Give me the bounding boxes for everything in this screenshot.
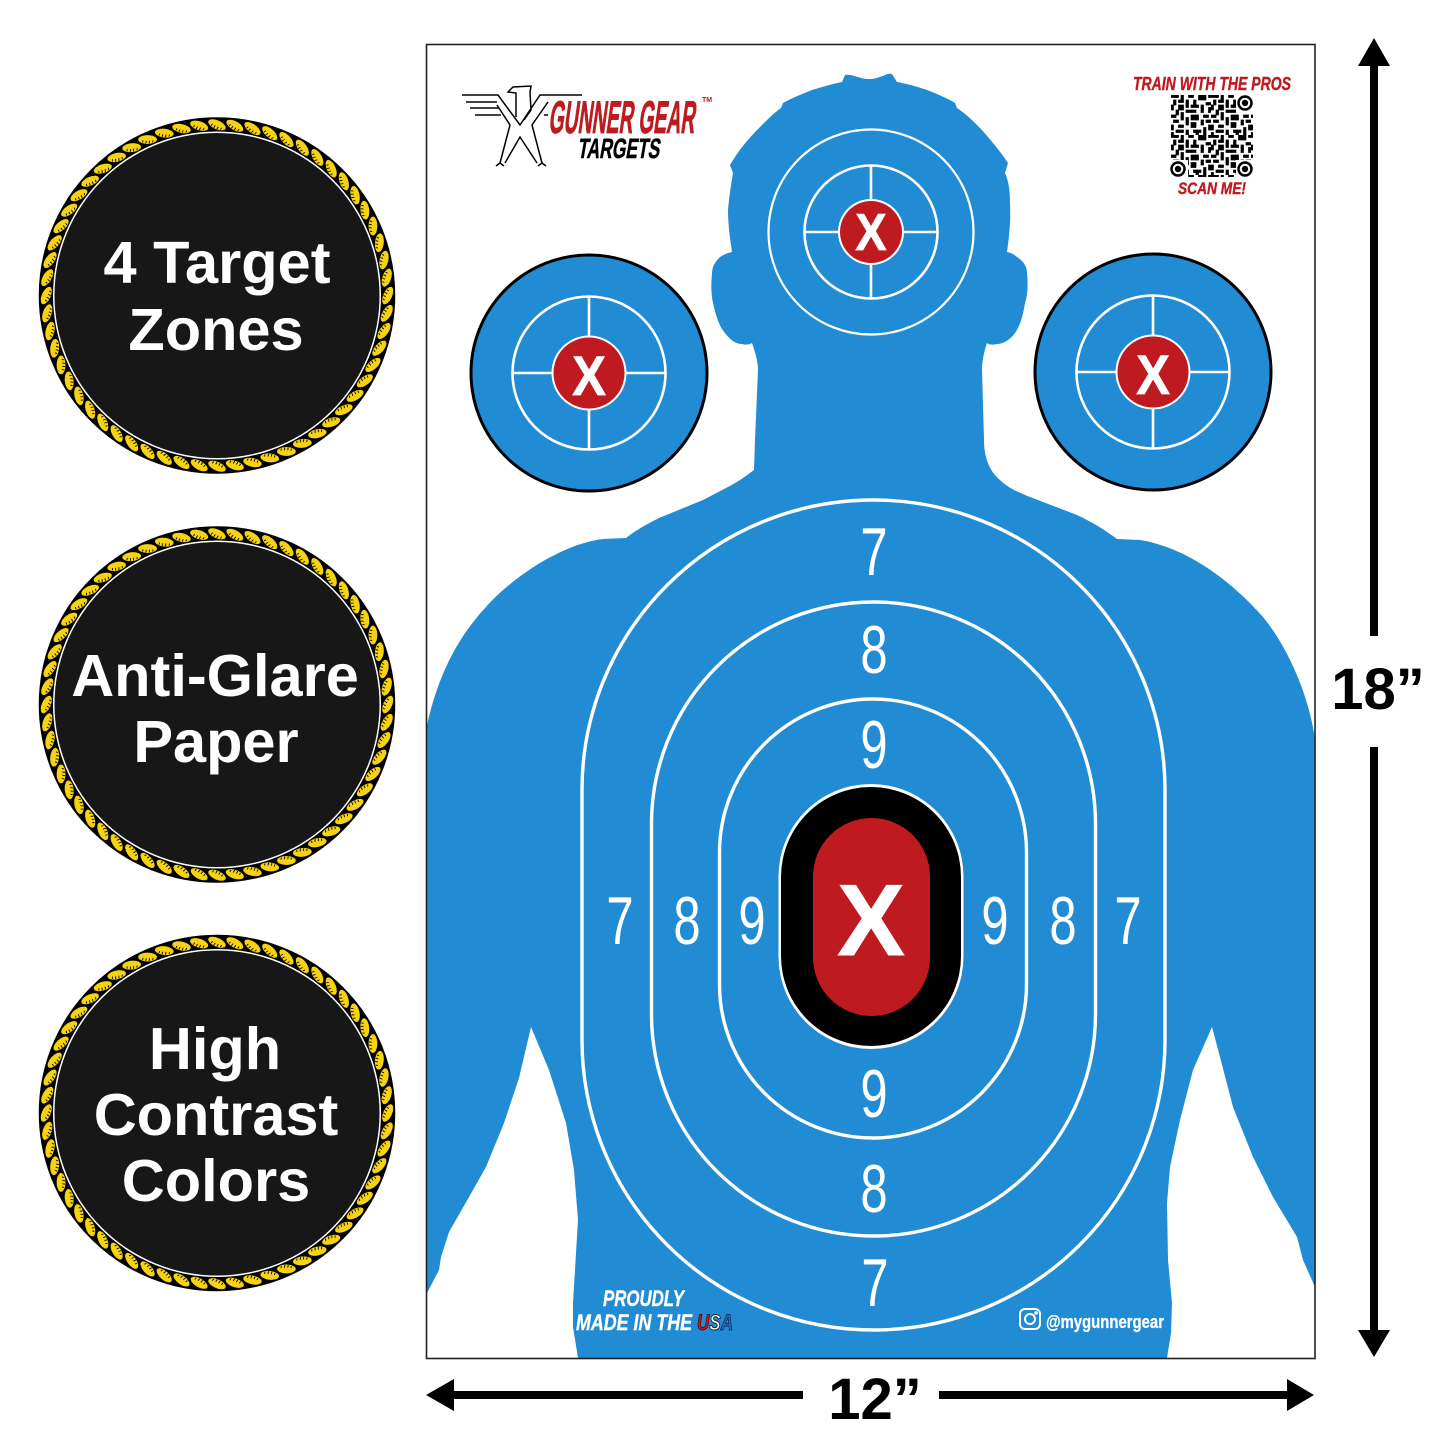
badge: High Contrast Colors: [16, 909, 418, 1317]
logo: Gunner Gear Targets: [462, 86, 712, 166]
logo: Gunner Gear Targets: TARGETS: [576, 132, 664, 164]
panel: paper target: GUNNER GEAR: [547, 91, 700, 143]
center X zone: [778, 784, 964, 1049]
made in the USA text: PROUDLY: [603, 1286, 686, 1311]
center X zone: X: [837, 865, 905, 977]
zone numbers: 9: [860, 706, 888, 783]
QR code: [1170, 95, 1254, 178]
badge: High Contrast Colors: Colors: [122, 1147, 310, 1214]
zone numbers: 8: [1049, 882, 1077, 959]
left shoulder target: [471, 255, 707, 491]
made in the USA text: MADE IN THE: [576, 1310, 693, 1335]
instagram handle: @mygunnergear: [1046, 1312, 1164, 1332]
logo: Gunner Gear Targets: TM: [702, 97, 712, 104]
icon: instagram: [1020, 1309, 1040, 1329]
badge: Anti-Glare Paper: Paper: [133, 708, 299, 775]
badge: Anti-Glare Paper: Anti-Glare: [71, 642, 359, 709]
QR block: SCAN ME!: [1178, 179, 1246, 198]
zone numbers: 7: [606, 882, 634, 959]
arrow: width dimension: [426, 1367, 1314, 1432]
zone numbers: 9: [981, 882, 1009, 959]
right shoulder target: X: [1136, 345, 1170, 407]
arrow: width dimension: 12”: [828, 1367, 922, 1432]
icon: eagle X emblem: [462, 86, 582, 166]
head target: [768, 130, 974, 334]
instagram handle: [1020, 1309, 1164, 1332]
zone numbers: 7: [860, 513, 888, 590]
zone numbers: 9: [738, 882, 766, 959]
zone numbers: 8: [673, 882, 701, 959]
arrow: height dimension: [1331, 38, 1425, 1357]
QR block: TRAIN WITH THE PROS: [1133, 74, 1291, 94]
right shoulder target: [1035, 254, 1271, 490]
left shoulder target: X: [572, 346, 606, 408]
zone numbers: 7: [1114, 882, 1142, 959]
badge: 4 Target Zones: Zones: [128, 296, 304, 363]
badge: 4 Target Zones: 4 Target: [103, 229, 331, 296]
silhouette body: [426, 74, 1315, 1358]
badge: High Contrast Colors: Contrast: [94, 1081, 338, 1148]
scoring zone rings: [582, 500, 1165, 1330]
zone numbers: [606, 513, 1142, 1321]
zone numbers: 9: [860, 1055, 888, 1132]
made in the USA text: USA: [697, 1310, 733, 1335]
badge: 4 Target Zones: [16, 92, 418, 499]
made in the USA text: [576, 1286, 733, 1335]
arrow: height dimension: 18”: [1331, 657, 1425, 722]
panel: paper target: [426, 44, 1315, 1358]
zone numbers: 8: [860, 611, 888, 688]
zone numbers: 7: [861, 1244, 889, 1321]
head target: X: [855, 204, 887, 262]
badge: Anti-Glare Paper: [16, 501, 418, 908]
QR block: [1133, 74, 1291, 198]
zone numbers: 8: [860, 1150, 888, 1227]
badge: High Contrast Colors: High: [149, 1015, 281, 1082]
